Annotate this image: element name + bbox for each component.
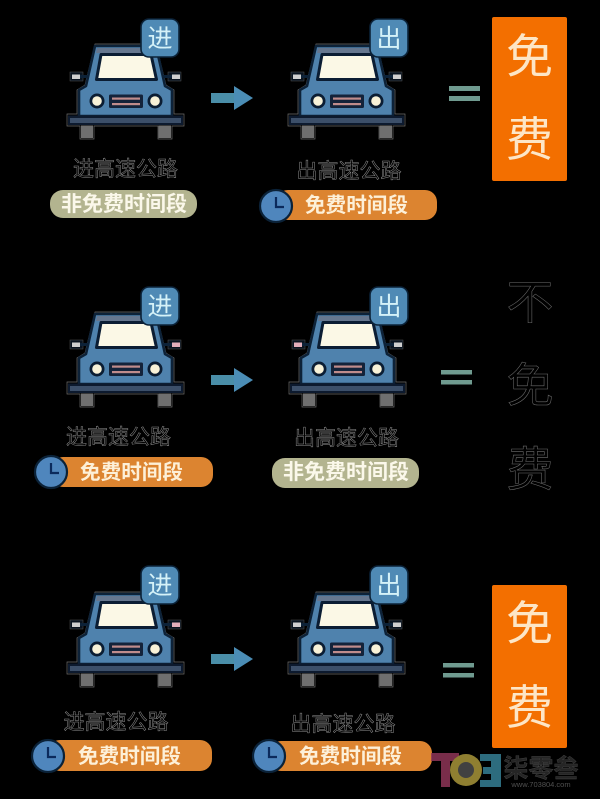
pill: non-free period row 2: 非免费时间段 [283, 460, 409, 484]
badge: 出 row 3: 出 [376, 572, 402, 600]
pill: free period row 1: 免费时间段 [305, 193, 408, 217]
car: row 1 left [67, 44, 184, 139]
pill: free period row 3 [32, 740, 212, 772]
row 2: enter free period, exit off-peak, result not free [35, 276, 554, 496]
row 1: enter off-peak, exit free period, result free [50, 17, 567, 222]
panel: free row 1: 免 [506, 30, 553, 83]
watermark: 703 logo: 柒零叁 [503, 754, 579, 783]
label: exit highway row 3: 出高速公路 [290, 713, 396, 736]
label: exit highway row 1: 出高速公路 [296, 160, 402, 183]
pill: non-free period row 2 [272, 458, 419, 488]
pill: free period row 3 right: 免费时间段 [299, 744, 402, 768]
equals sign row 3 [443, 663, 474, 678]
watermark: 703 logo [431, 753, 579, 789]
label: enter highway row 3: 进高速公路 [64, 711, 168, 734]
arrow row 2 [211, 368, 253, 392]
equals sign row 2 [441, 370, 472, 384]
arrow row 3 [211, 647, 253, 671]
badge: 出 row 3 [370, 566, 408, 604]
panel: free row 1 [492, 17, 567, 181]
panel: free row 3 [492, 585, 567, 748]
badge: 出 row 2: 出 [376, 293, 402, 321]
result: not free: 免 [506, 359, 554, 412]
label: enter highway row 2: 进高速公路 [66, 426, 171, 449]
arrow row 1 [211, 86, 253, 110]
car: row 2 left [67, 312, 184, 407]
car: row 2 right [289, 312, 406, 407]
badge: 进 row 2 [141, 287, 179, 325]
result: not free [506, 276, 554, 496]
badge: 出 row 2 [370, 287, 408, 325]
pill: free period row 1 [260, 190, 437, 222]
panel: free row 1: 费 [506, 113, 553, 166]
badge: 进 row 3: 进 [147, 572, 173, 600]
panel: free row 3: 免 [506, 597, 553, 650]
badge: 进 row 1: 进 [147, 25, 173, 53]
badge: 进 row 2: 进 [147, 293, 173, 321]
row 3: enter free period, exit free period, result free [32, 566, 567, 772]
car: row 3 left [67, 592, 184, 687]
badge: 进 row 3 [141, 566, 179, 604]
car: row 3 right [288, 592, 405, 687]
pill: free period row 3: 免费时间段 [78, 744, 181, 768]
watermark: 703 logo: www.703804.com [510, 780, 571, 789]
result: not free: 不 [506, 276, 554, 329]
pill: free period row 2 [35, 456, 213, 488]
pill: free period row 3 right [253, 740, 432, 772]
result: not free: 费 [506, 443, 554, 496]
badge: 出 row 1: 出 [376, 25, 402, 53]
equals sign row 1 [449, 86, 480, 101]
panel: free row 3: 费 [506, 681, 553, 734]
label: exit highway row 2: 出高速公路 [294, 427, 399, 450]
label: enter highway row 1: 进高速公路 [73, 158, 178, 181]
car: row 1 right [288, 44, 405, 139]
pill: non-free period row 1: 非免费时间段 [61, 192, 187, 216]
badge: 出 row 1 [370, 19, 408, 57]
badge: 进 row 1 [141, 19, 179, 57]
pill: free period row 2: 免费时间段 [80, 460, 183, 484]
